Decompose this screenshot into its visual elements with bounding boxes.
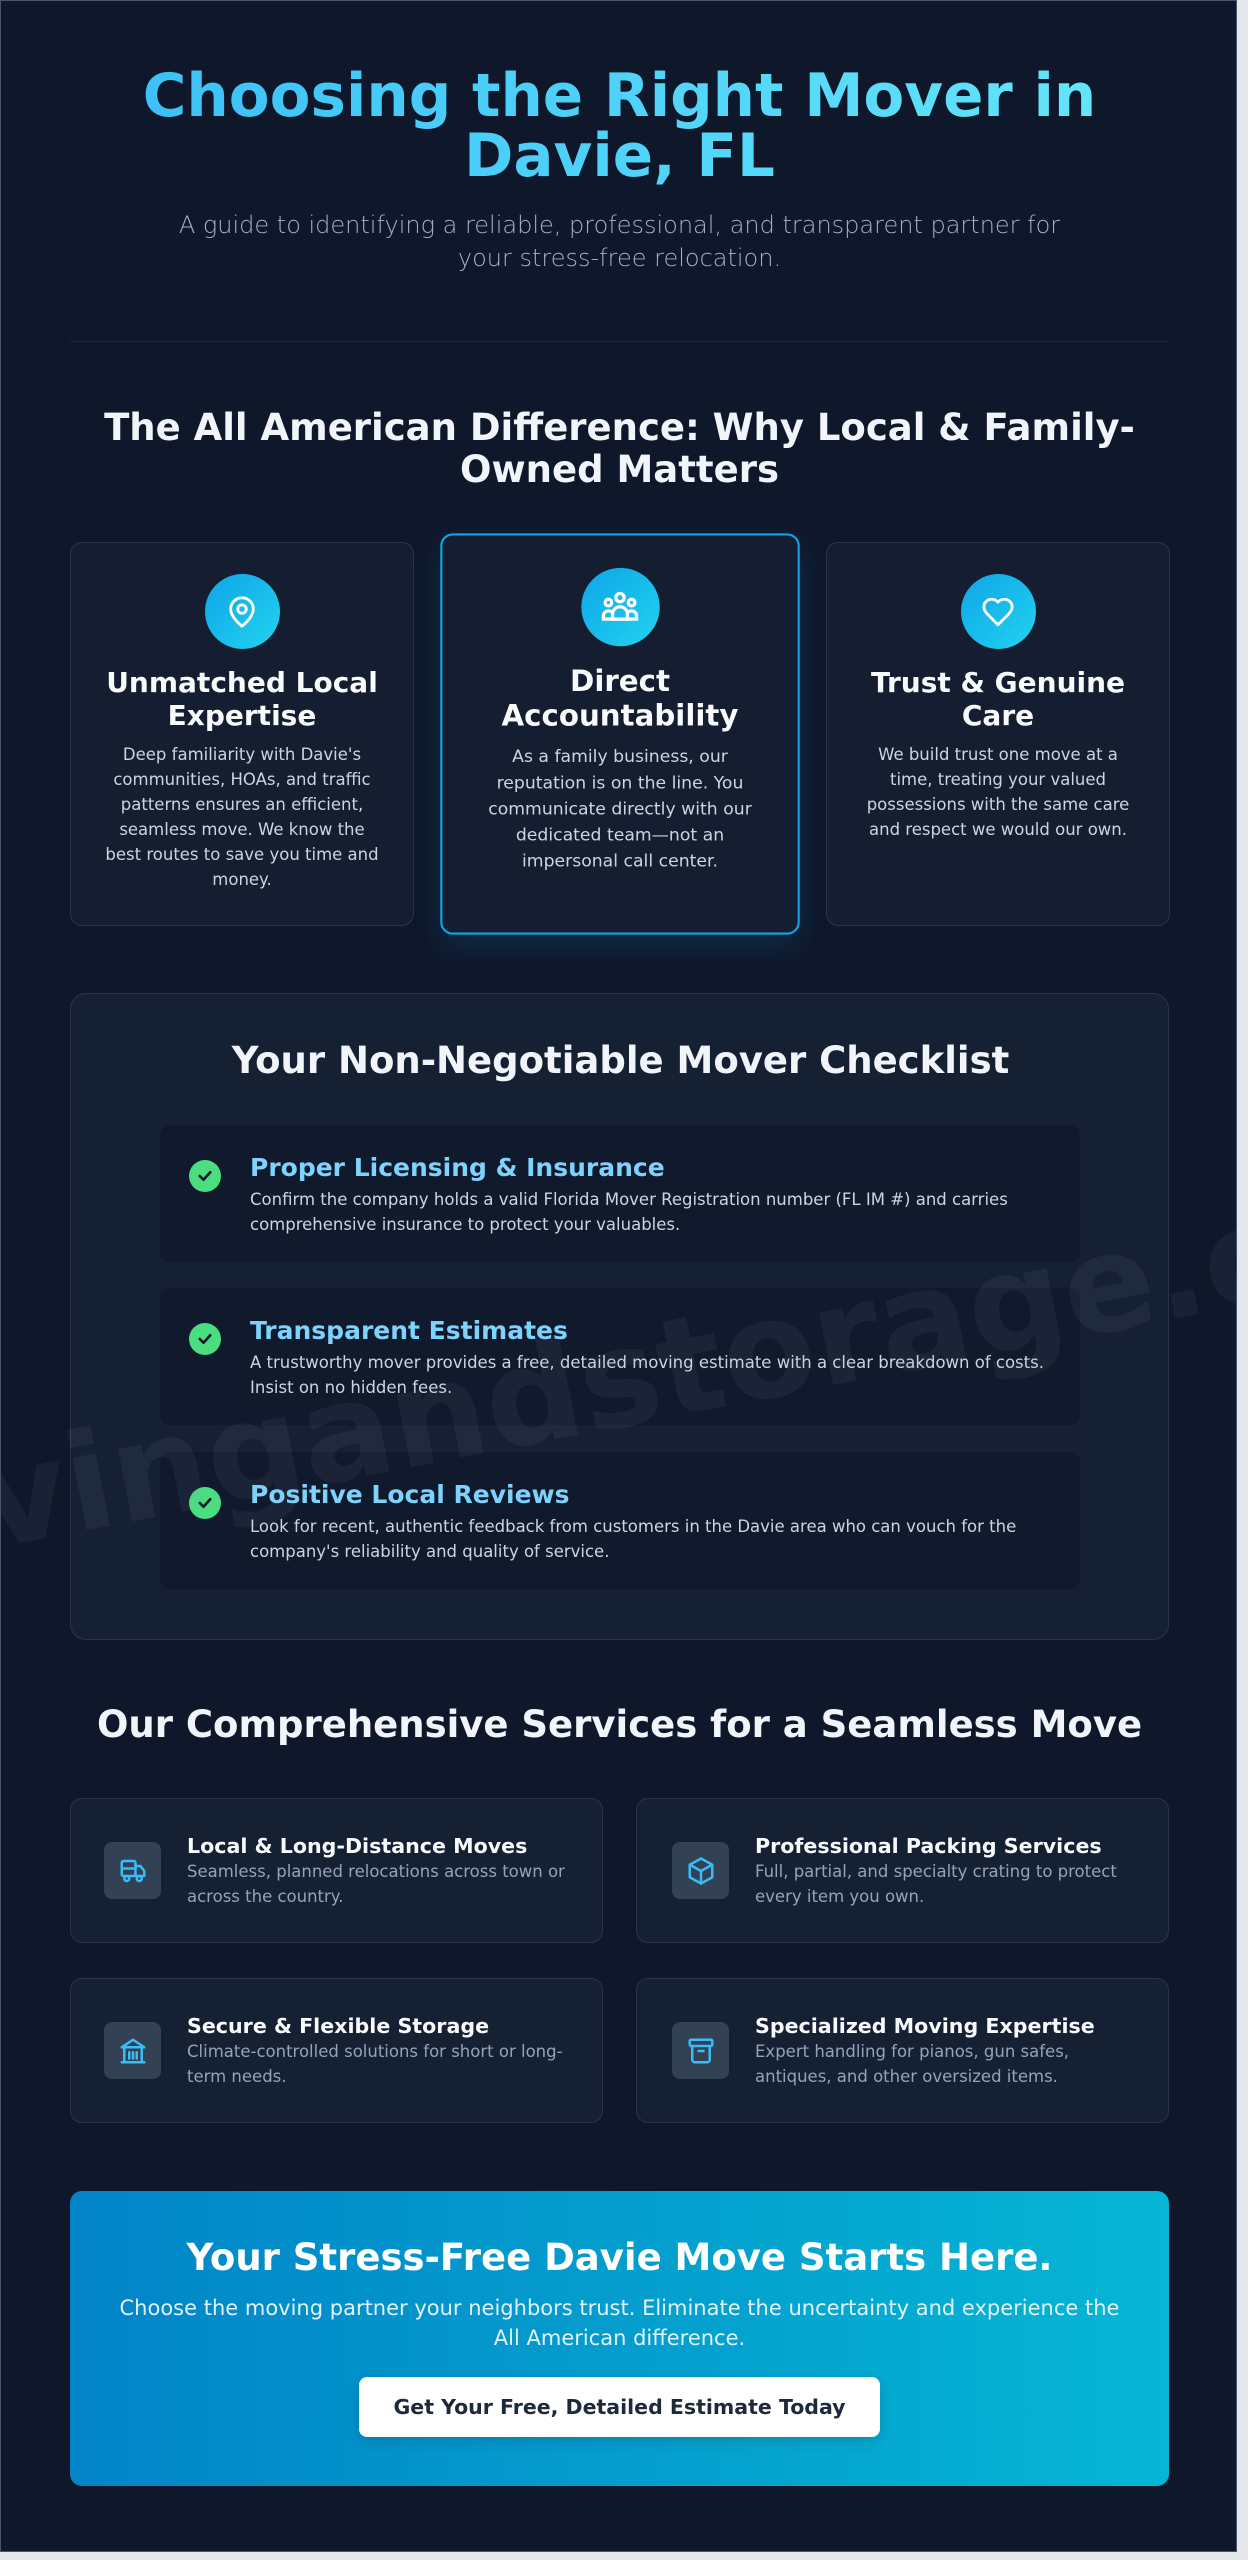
service: specialized: Expert handling for pianos, gun safes, antiques, and other oversized items. (755, 2042, 1069, 2086)
card: local expertise: Unmatched Local Expertise (106, 666, 378, 732)
service: packing: Professional Packing Services (755, 1834, 1102, 1858)
service: specialized (636, 1978, 1169, 2123)
icon: heart (960, 574, 1036, 649)
card: trust & care (826, 542, 1170, 926)
service: moves: Local & Long-Distance Moves (187, 1834, 527, 1858)
item: reviews (160, 1452, 1080, 1589)
icon: archive (672, 2022, 729, 2079)
card: local expertise: Deep familiarity with Davie's communities, HOAs, and traffic patterns ensures an efficient, seamless move. We know the best routes to save you time and money. (105, 745, 379, 889)
item: reviews: Look for recent, authentic feedback from customers in the Davie area who can vouch for the company's reliability and quality of service. (250, 1517, 1016, 1561)
heading: services: Our Comprehensive Services for a Seamless Move (97, 1703, 1142, 1746)
card: local expertise (70, 542, 414, 926)
service: packing: Full, partial, and specialty crating to protect every item you own. (755, 1862, 1117, 1906)
item: estimates: A trustworthy mover provides a free, detailed moving estimate with a clear breakdown of costs. Insist on no hidden fees. (250, 1353, 1044, 1397)
service: specialized: Specialized Moving Expertise (755, 2014, 1095, 2038)
heading: all american difference: The All American Difference: Why Local & Family-Owned Matters (104, 406, 1135, 491)
service: packing (636, 1798, 1169, 1943)
icon: people (581, 568, 659, 646)
checklist heading: Your Non-Negotiable Mover Checklist (232, 1039, 1009, 1082)
title: Choosing the Right Mover in Davie, FL (143, 62, 1096, 191)
card: trust & care: Trust & Genuine Care (871, 666, 1125, 732)
item: estimates: Transparent Estimates (250, 1316, 568, 1345)
subtitle: A guide to identifying a reliable, professional, and transparent partner for your stress-free relocation. (179, 211, 1060, 272)
icon: truck (104, 1842, 161, 1899)
card: direct accountability (440, 533, 800, 935)
service: moves: Seamless, planned relocations across town or across the country. (187, 1862, 565, 1906)
callout: cta (70, 2191, 1169, 2486)
cta text: Choose the moving partner your neighbors trust. Eliminate the uncertainty and experience the All American difference. (120, 2296, 1119, 2350)
icon: warehouse (104, 2022, 161, 2079)
card: direct accountability: As a family business, our reputation is on the line. You communicate directly with our dedicated team—not an impersonal call center. (488, 747, 752, 871)
icon: map pin (204, 574, 280, 649)
cta heading: Your Stress-Free Davie Move Starts Here. (186, 2236, 1052, 2279)
card: direct accountability: Direct Accountability (502, 664, 738, 733)
service: storage (70, 1978, 603, 2123)
item: licensing: Confirm the company holds a valid Florida Mover Registration number (FL IM #) and carries comprehensive insurance to protect your valuables. (250, 1190, 1008, 1234)
panel: checklist (70, 993, 1169, 1640)
item: estimates (160, 1288, 1080, 1425)
item: licensing: Proper Licensing & Insurance (250, 1153, 665, 1182)
service: moves (70, 1798, 603, 1943)
service: storage: Secure & Flexible Storage (187, 2014, 489, 2038)
button: Get Your Free, Detailed Estimate Today (393, 2395, 846, 2419)
card: trust & care: We build trust one move at a time, treating your valued possessions with the same care and respect we would our own. (867, 745, 1129, 839)
button (359, 2377, 880, 2437)
item: reviews: Positive Local Reviews (250, 1480, 570, 1509)
service: storage: Climate-controlled solutions for short or long-term needs. (187, 2042, 563, 2086)
icon: box (672, 1842, 729, 1899)
item: licensing (160, 1125, 1080, 1262)
